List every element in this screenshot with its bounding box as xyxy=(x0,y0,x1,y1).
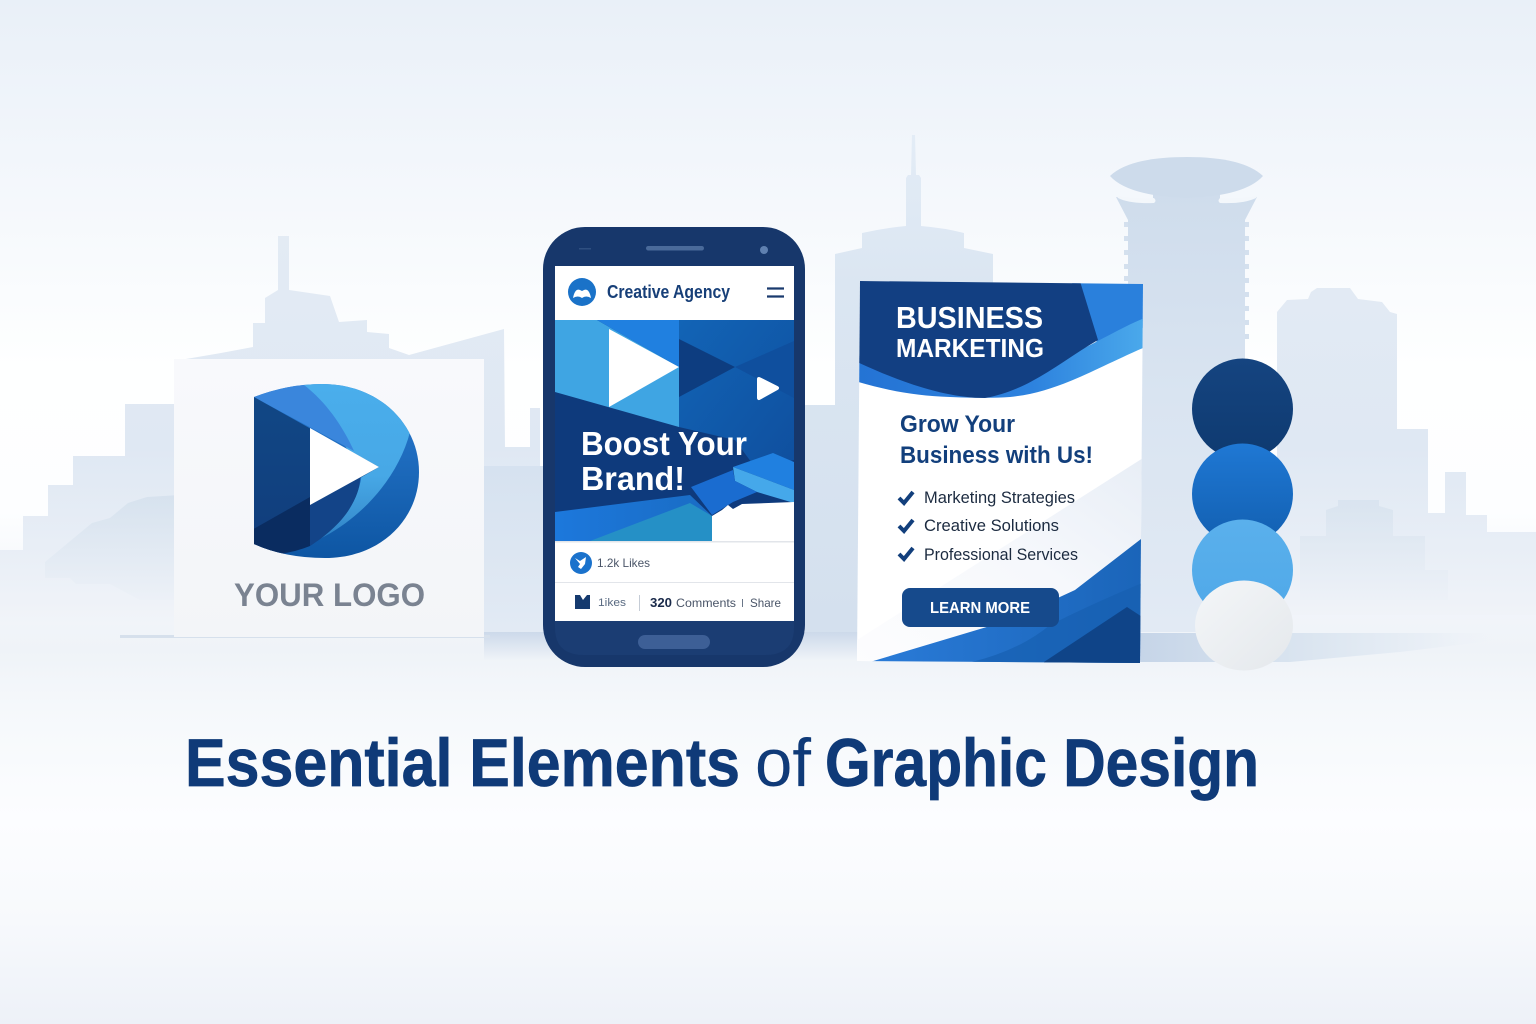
title bold end: Graphic Design xyxy=(825,725,1259,801)
hero mid facet xyxy=(597,320,679,367)
separator small xyxy=(742,599,743,607)
flyer heading xyxy=(896,300,1044,363)
panel: logo card xyxy=(174,359,484,637)
swatch blue xyxy=(1192,444,1293,544)
skyline: right lower building xyxy=(1300,500,1448,600)
skyline: disc-top tower xyxy=(1110,157,1263,632)
logo circle xyxy=(568,278,596,306)
hero headline xyxy=(581,425,747,497)
swatch light blue xyxy=(1192,520,1293,620)
list item 1: Marketing Strategies xyxy=(924,489,1075,507)
hero white corner xyxy=(712,502,794,541)
logo book mark xyxy=(573,290,591,298)
phone bottom rim xyxy=(555,621,794,655)
flyer dark wedge xyxy=(1044,607,1140,663)
hero banner xyxy=(555,320,794,541)
flyer checklist xyxy=(899,489,1078,564)
panel: business flyer xyxy=(855,278,1150,670)
icon: small play xyxy=(759,379,777,398)
button shape xyxy=(902,588,1059,627)
icon: check 1 xyxy=(899,492,913,503)
icon: hamburger menu xyxy=(767,288,784,296)
title xyxy=(185,725,1259,801)
hero play triangle xyxy=(609,329,679,407)
tower white gaps xyxy=(1117,196,1257,203)
logo navy facet xyxy=(250,397,379,554)
flyer blue wedge xyxy=(872,539,1141,663)
list item 2: Creative Solutions xyxy=(924,517,1059,535)
flyer page xyxy=(857,281,1143,663)
flyer mid wedge xyxy=(972,584,1141,663)
comments label: Comments xyxy=(676,596,736,610)
likes count: 1.2k Likes xyxy=(597,556,650,570)
subheading line 1: Grow Your xyxy=(900,411,1015,438)
share label: Share xyxy=(750,596,781,610)
icon: check 2 xyxy=(899,520,913,531)
logo mid facet xyxy=(250,382,354,451)
phone home button xyxy=(638,635,710,649)
hero navy base xyxy=(555,320,794,516)
likes divider xyxy=(555,541,794,542)
logo base xyxy=(250,380,425,562)
hero upper accent xyxy=(733,453,794,490)
flyer button xyxy=(902,588,1059,627)
phone screen xyxy=(555,266,794,621)
subheading line 2: Business with Us! xyxy=(900,442,1093,469)
social stats xyxy=(555,541,794,611)
skyline: right rounded building xyxy=(1277,288,1536,615)
hero arrow shape xyxy=(691,470,757,515)
headline line 2: Brand! xyxy=(581,460,685,497)
title bold start: Essential Elements xyxy=(185,725,740,801)
icon: agency logo xyxy=(568,278,596,306)
phone camera xyxy=(760,246,768,254)
tower body xyxy=(1116,190,1257,632)
icon: D play logo xyxy=(250,380,425,562)
logo play triangle xyxy=(310,428,379,505)
button label: LEARN MORE xyxy=(930,600,1030,617)
swatch white xyxy=(1195,580,1293,670)
hero light facet xyxy=(555,320,679,427)
skyline: building behind phone xyxy=(484,466,546,632)
swatch navy xyxy=(1192,358,1293,460)
headline line 1: Boost Your xyxy=(581,425,747,462)
colour palette swatches xyxy=(1192,358,1293,670)
likes label: 1ikes xyxy=(598,597,627,609)
icon: likes bird xyxy=(570,552,592,574)
title connector: of xyxy=(755,725,811,801)
icon: bookmark xyxy=(575,595,590,609)
phone body xyxy=(543,227,805,667)
phone speaker xyxy=(646,246,704,250)
logo dark facet xyxy=(250,497,310,553)
app header xyxy=(568,278,784,306)
hero dark triangle xyxy=(679,339,735,397)
flyer pale wedge xyxy=(985,459,1142,597)
agency name: Creative Agency xyxy=(607,282,730,302)
heading line 1: BUSINESS xyxy=(896,300,1043,335)
separator xyxy=(639,595,640,611)
skyline: central tower with spire xyxy=(805,135,1000,632)
ground shadow: centre xyxy=(484,632,864,660)
ground shadow: right xyxy=(1140,633,1500,662)
tower disc xyxy=(1110,157,1263,198)
logo right lower facet xyxy=(310,485,358,546)
icon: check 3 xyxy=(899,548,913,559)
ground shadow: under card xyxy=(120,635,490,638)
skyline: left low hill building xyxy=(45,495,180,600)
flyer artwork xyxy=(855,278,1150,670)
bird circle xyxy=(570,552,592,574)
list item 3: Professional Services xyxy=(924,546,1078,564)
logo card background xyxy=(174,359,484,637)
comments number: 320 xyxy=(650,595,672,610)
phone sensor xyxy=(579,248,591,250)
hero light accent xyxy=(733,467,794,503)
flyer top accent xyxy=(1072,283,1143,342)
bird mark xyxy=(575,557,586,569)
skyline: left stepped buildings xyxy=(0,404,180,625)
panel: phone mockup xyxy=(543,227,805,667)
hero upper right blue xyxy=(679,320,794,470)
logo light swoosh xyxy=(304,384,410,538)
hero lower teal wedge xyxy=(590,503,712,541)
hero right triangle xyxy=(736,341,794,388)
hero lower blue wedge xyxy=(555,495,712,541)
skyline: left tower with spire xyxy=(180,236,540,632)
flyer navy header xyxy=(855,278,1098,398)
flyer subheading xyxy=(900,411,1093,469)
city skyline silhouette xyxy=(0,135,1536,632)
heading line 2: MARKETING xyxy=(896,335,1044,363)
flyer wave band xyxy=(855,316,1150,398)
row divider xyxy=(555,582,794,583)
tower ribs xyxy=(1124,222,1249,339)
logo wordmark: YOUR LOGO xyxy=(234,577,425,613)
